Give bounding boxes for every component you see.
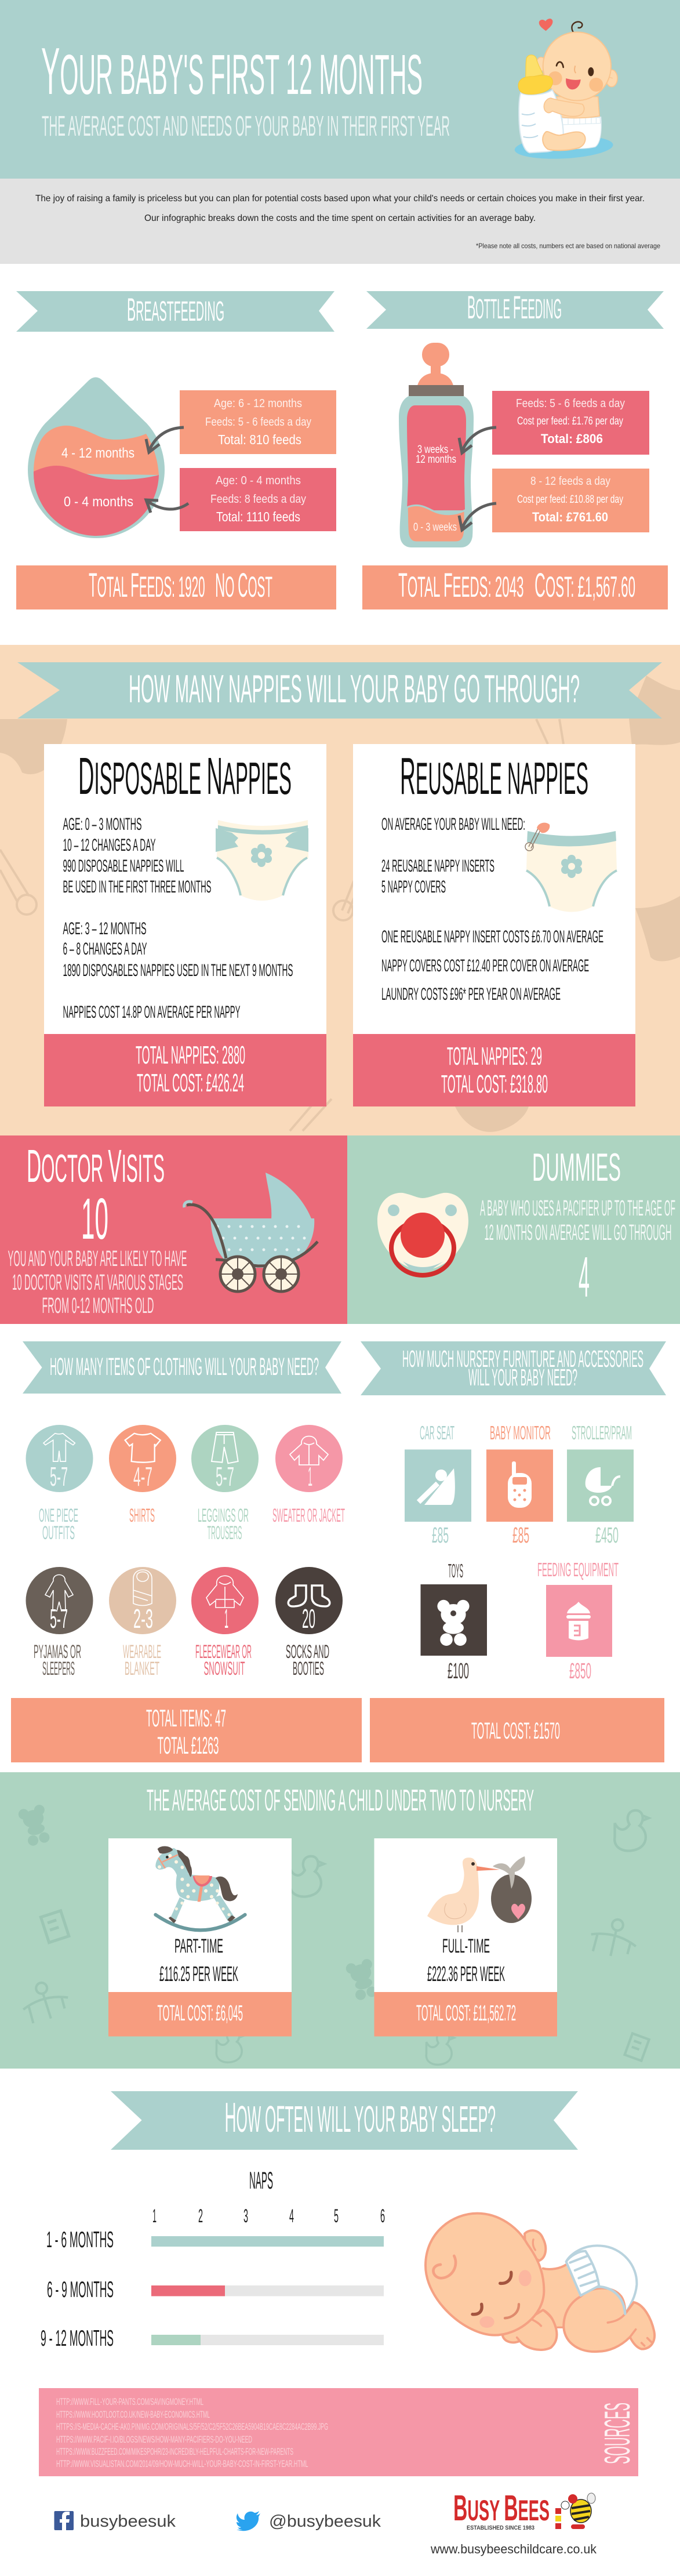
ribbon: bottle feeding	[366, 289, 664, 329]
text block: source links: HTTP://WWW.VISUALISTAN.COM/2014/09/HOW-MUCH-WILL-YOUR-BABY-COST-IN-FIRST-YEAR.HTML	[56, 2458, 308, 2469]
card: full-time: FULL-TIME	[442, 1935, 490, 1957]
item: baby monitor	[486, 1422, 553, 1548]
item: fleecewear or snowsuit: 1	[224, 1603, 228, 1634]
text block: 0-3 months	[63, 815, 211, 897]
icon: pacifier	[377, 1193, 468, 1275]
panel: bottle feeding	[362, 289, 668, 609]
item: pyjamas or sleepers	[26, 1567, 93, 1679]
panel: nappies	[0, 645, 680, 1135]
chart: baby bottle: 3 weeks -	[417, 444, 453, 456]
chart: milk drop: 4 - 12 months	[61, 445, 134, 461]
item: feeding equipment	[537, 1559, 619, 1684]
ribbon: furniture heading	[361, 1341, 666, 1395]
card: reusable nappies	[353, 744, 635, 1106]
text block: source links: HTTP://WWW.FILL-YOUR-PANTS.COM/SAVINGMONEY.HTML	[56, 2396, 203, 2407]
card: part-time: PART-TIME	[174, 1935, 223, 1957]
item: sweater or jacket: 1	[308, 1461, 312, 1492]
icon: bee	[555, 2493, 595, 2529]
panel: doctor visits: YOU AND YOUR BABY ARE LIKELY TO HAVE	[8, 1247, 187, 1271]
panel: clothing: TROUSERS	[208, 1522, 242, 1543]
card: disposable nappies	[44, 744, 326, 1106]
panel: dummies	[347, 1135, 680, 1324]
callout: 6 to 12 months: Age: 6 - 12 months	[214, 397, 302, 410]
item: baby monitor: £85	[512, 1523, 529, 1548]
item: wearable blanket	[109, 1567, 176, 1679]
text block: doctor visits	[8, 1247, 187, 1318]
item: shirts: SHIRTS	[129, 1505, 155, 1526]
arrow: to 4-12 months	[146, 427, 184, 452]
chart: milk drop	[28, 377, 165, 538]
item: leggings or trousers	[191, 1425, 259, 1543]
panel: nursery furniture: BABY MONITOR	[490, 1422, 551, 1443]
item: shirts	[109, 1425, 176, 1526]
callout: 0 to 4 months: Total: 1110 feeds	[216, 509, 300, 524]
text: SWEATER OR JACKET	[272, 1505, 345, 1526]
bar chart: naps: 5	[334, 2205, 339, 2226]
note: *Please note all costs, numbers ect are based on national average	[476, 242, 660, 250]
panel: dummies: 4	[579, 1245, 590, 1309]
item: fleecewear or snowsuit: SNOWSUIT	[204, 1658, 245, 1679]
text block: dummies	[480, 1196, 675, 1245]
text block: source links: HTTPS://WWW.BUZZFEED.COM/MIKESPOHR/23-INCREDIBLY-HELPFUL-CHARTS-FOR-NEW-PARENTS	[56, 2446, 293, 2457]
icon: stork with bundle	[427, 1856, 532, 1932]
panel: nursery furniture	[361, 1341, 666, 1762]
total: clothing	[11, 1698, 362, 1762]
text block: 0-3 months: AGE: 0 – 3 MONTHS	[63, 815, 141, 834]
intro panel	[0, 179, 680, 264]
text block: needs: 5 NAPPY COVERS	[381, 877, 446, 897]
item: car seat: CAR SEAT	[420, 1422, 454, 1443]
item: one piece outfits: 5-7	[50, 1461, 68, 1492]
total: disposable	[136, 1041, 245, 1097]
item: toys	[421, 1560, 487, 1684]
text block: doctor visits: FROM 0-12 MONTHS OLD	[42, 1294, 154, 1318]
bar chart: naps: 3	[243, 2205, 248, 2226]
item: one piece outfits: ONE PIECE	[39, 1505, 78, 1526]
bar chart: naps: NAPS	[249, 2167, 273, 2194]
facebook link: busybeesuk	[80, 2512, 176, 2531]
card: part-time: £116.25 PER WEEK	[159, 1962, 238, 1986]
card: full-time: TOTAL COST: £11,562.72	[416, 2001, 516, 2026]
callout: 6 to 12 months: Feeds: 5 - 6 feeds a day	[205, 416, 311, 429]
card: disposable nappies: TOTAL NAPPIES: 2880	[136, 1041, 245, 1069]
icon: baby with bottle	[514, 19, 617, 161]
panel: sleep	[41, 2091, 654, 2352]
bar chart: naps: 4	[289, 2205, 294, 2226]
twitter link	[237, 2511, 381, 2531]
item: socks and booties: 20	[302, 1603, 315, 1634]
ribbon: bottle feeding: BOTTLE FEEDING	[467, 289, 562, 325]
panel: clothing: LEGGINGS OR	[198, 1505, 249, 1526]
total: breastfeeding	[16, 565, 336, 609]
arrow: to 0-4 months	[146, 500, 188, 513]
background pattern	[0, 676, 680, 1132]
callout: 5-6 feeds: Total: £806	[541, 431, 603, 446]
item: car seat	[405, 1422, 471, 1548]
ribbon: breastfeeding	[16, 291, 334, 332]
header panel	[0, 0, 680, 179]
callout: 0 to 4 months: Feeds: 8 feeds a day	[210, 493, 306, 506]
panel: nursery cost	[0, 1772, 680, 2069]
chart: milk drop: 0 - 4 months	[64, 494, 133, 510]
text block: source links	[56, 2396, 328, 2469]
item: wearable blanket: 2-3	[133, 1603, 153, 1634]
bar chart: naps: 6 - 9 MONTHS	[47, 2277, 114, 2302]
card: full-time: £222.36 PER WEEK	[427, 1962, 505, 1986]
callout: 5-6 feeds	[492, 391, 649, 455]
item: socks and booties: SOCKS AND	[286, 1641, 329, 1662]
callout: 5-6 feeds: Cost per feed: £1.76 per day	[517, 415, 623, 427]
text block: source links: HTTPS://WWW.HOOTLOOT.CO.UK/NEW-BABY-ECONOMICS.HTML	[56, 2409, 210, 2420]
callout: 5-6 feeds: Feeds: 5 - 6 feeds a day	[516, 397, 625, 410]
website: www.busybeeschildcare.co.uk	[430, 2542, 597, 2556]
card: reusable nappies: TOTAL NAPPIES: 29	[447, 1042, 542, 1071]
text block: 3-12 months: AGE: 3 – 12 MONTHS	[63, 919, 146, 938]
icon: pram	[184, 1173, 318, 1291]
arrow: to 3 weeks-12 months	[459, 427, 496, 453]
item: fleecewear or snowsuit	[191, 1567, 259, 1679]
card: disposable nappies: TOTAL COST: £426.24	[137, 1069, 244, 1097]
card: disposable nappies: BE USED IN THE FIRST THREE MONTHS	[63, 877, 211, 897]
icon: rocking horse	[155, 1846, 245, 1930]
total: furniture	[370, 1698, 664, 1762]
item: stroller or pram: £450	[595, 1523, 619, 1548]
item: shirts: 4-7	[133, 1461, 152, 1492]
total: breastfeeding: TOTAL FEEDS: 1920 NO COST	[89, 567, 272, 604]
callout: 8-12 feeds: Total: £761.60	[532, 510, 608, 524]
bar chart: naps: 9 - 12 MONTHS	[41, 2326, 114, 2351]
bar chart: naps: 1	[152, 2205, 157, 2226]
panel: doctor visits: DOCTOR VISITS	[27, 1140, 165, 1192]
panel: sleep: 6	[380, 2205, 385, 2226]
background pattern	[17, 1804, 657, 2065]
total: clothing: TOTAL £1263	[158, 1732, 219, 1759]
bar chart: naps: 1 - 6 MONTHS	[46, 2227, 114, 2252]
facebook link	[54, 2511, 176, 2531]
item: wearable blanket: WEARABLE	[123, 1641, 161, 1662]
twitter link: @busybeesuk	[269, 2512, 381, 2531]
item: leggings or trousers: 5-7	[216, 1461, 234, 1492]
item: pyjamas or sleepers: SLEEPERS	[42, 1658, 75, 1679]
callout: 8-12 feeds: 8 - 12 feeds a day	[530, 475, 610, 488]
total: reusable	[441, 1042, 548, 1098]
item: toys: £100	[448, 1659, 469, 1684]
ribbon: sleep heading	[111, 2091, 578, 2150]
item: car seat: £85	[432, 1523, 449, 1548]
item: one piece outfits	[26, 1425, 93, 1543]
callout: 0 to 4 months	[180, 468, 336, 531]
callout: 6 to 12 months	[180, 390, 336, 454]
text block: 0-3 months: 10 – 12 CHANGES A DAY	[63, 836, 155, 855]
text block: needs	[381, 815, 525, 897]
logo: busy bees: ESTABLISHED SINCE 1983	[467, 2524, 534, 2531]
text: SOURCES	[598, 2403, 638, 2464]
text block: source links: HTTPS://S-MEDIA-CACHE-AK0.PINIMG.COM/ORIGINALS/5F/52/C2/5F52C26BEA5904B19CAE8C2284AC2B99.JPG	[56, 2421, 328, 2432]
chart: baby bottle: 0 - 3 weeks	[413, 521, 457, 534]
callout: 8-12 feeds: Cost per feed: £10.88 per day	[517, 494, 623, 506]
card: disposable nappies: 1890 DISPOSABLES NAPPIES USED IN THE NEXT 9 MONTHS	[63, 961, 293, 980]
callout: 0 to 4 months: Age: 0 - 4 months	[216, 474, 301, 487]
bar chart: naps	[41, 2167, 385, 2351]
icon: reusable nappy	[525, 823, 617, 912]
text block: 3-12 months	[63, 919, 293, 980]
item: feeding equipment: £850	[569, 1659, 591, 1684]
text block: needs: 24 REUSABLE NAPPY INSERTS	[381, 857, 494, 876]
item: stroller or pram	[567, 1422, 634, 1548]
intro text line two: Our infographic breaks down the costs and the time spent on certain activities for an average baby.	[144, 213, 536, 223]
text block: 3-12 months: 6 – 8 CHANGES A DAY	[63, 939, 147, 959]
ribbon: clothing heading	[23, 1341, 341, 1394]
total: clothing: TOTAL ITEMS: 47	[146, 1704, 226, 1732]
panel: sources	[39, 2388, 638, 2476]
item: sweater or jacket	[272, 1425, 345, 1526]
card: part-time	[108, 1838, 292, 2037]
panel: clothing: PYJAMAS OR	[34, 1641, 81, 1662]
card: part-time: TOTAL COST: £6,045	[158, 2001, 243, 2026]
card: disposable nappies: NAPPIES COST 14.8P ON AVERAGE PER NAPPY	[63, 1003, 240, 1022]
text block: source links: HTTPS://WWW.PACIF-I.IO/BLOGS/NEWS/HOW-MANY-PACIFIERS-DO-YOU-NEED	[56, 2434, 252, 2445]
icon: disposable nappy	[216, 820, 308, 901]
chart: baby bottle: 12 months	[416, 453, 456, 466]
arrow: to 0-3 weeks	[459, 503, 496, 530]
panel: breastfeeding	[16, 291, 336, 609]
item: wearable blanket: BLANKET	[125, 1658, 159, 1679]
callout: 8-12 feeds	[492, 469, 649, 532]
panel: clothing: FLEECEWEAR OR	[195, 1641, 252, 1662]
card: disposable nappies: DISPOSABLE NAPPIES	[78, 748, 292, 806]
item: one piece outfits: OUTFITS	[42, 1522, 75, 1543]
panel: doctor visits	[0, 1135, 347, 1324]
callout: 6 to 12 months: Total: 810 feeds	[218, 432, 301, 447]
item: socks and booties	[275, 1567, 343, 1679]
panel: doctor visits: 10	[81, 1187, 108, 1251]
text block: reusable costs	[381, 927, 603, 1004]
panel: doctor visits: 10 DOCTOR VISITS AT VARIOUS STAGES	[12, 1271, 183, 1295]
logo: busy bees: BUSY BEES	[453, 2488, 550, 2528]
intro text: The joy of raising a family is priceless but you can plan for potential costs based upon what your child's needs or certain choices you make in their first year.	[35, 194, 645, 204]
ribbon: breastfeeding: BREASTFEEDING	[127, 291, 224, 328]
bar chart: naps: 2	[198, 2205, 203, 2226]
item: pyjamas or sleepers: 5-7	[50, 1603, 68, 1634]
chart: baby bottle	[399, 343, 474, 547]
item: toys: TOYS	[448, 1560, 463, 1581]
icon: sleeping baby	[426, 2214, 654, 2352]
ribbon: nappies heading	[17, 662, 662, 719]
card: full-time	[374, 1838, 557, 2037]
item: socks and booties: BOOTIES	[293, 1658, 324, 1679]
panel: clothing	[11, 1341, 362, 1762]
text block: 0-3 months: 990 DISPOSABLE NAPPIES WILL	[63, 857, 184, 876]
